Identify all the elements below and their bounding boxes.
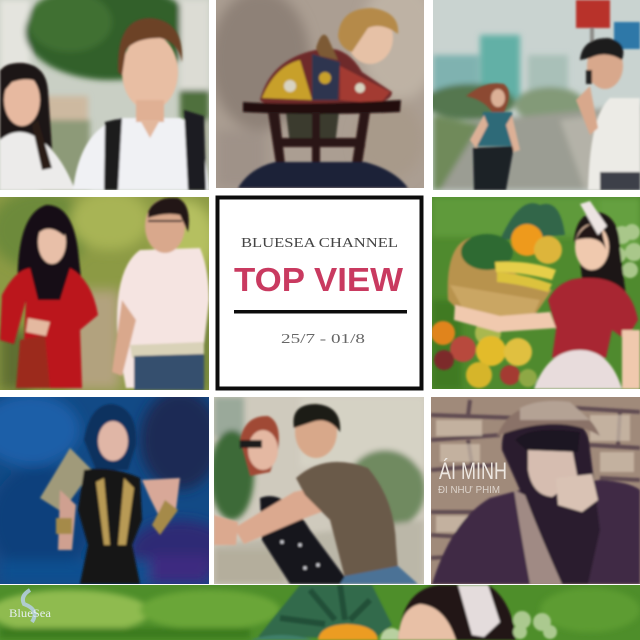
photo: couple in red dress and white shirt	[0, 190, 215, 390]
photo: girl with fruit basket	[431, 197, 640, 389]
photo: embracing couple	[210, 397, 425, 584]
divider rule	[234, 310, 407, 314]
logo: bluesea	[9, 590, 52, 622]
channel name: BLUESEA CHANNEL	[241, 236, 398, 251]
photo: singer in black and gold	[0, 397, 209, 584]
album title: ÁI MINH	[439, 458, 507, 485]
photo: ai minh album cover	[431, 397, 640, 584]
photo: bottom banner with girl and pineapple	[0, 585, 640, 640]
heading: top view: TOP VIEW	[234, 262, 403, 299]
album subtitle: ĐI NHƯ PHIM	[438, 485, 500, 496]
title box	[218, 198, 422, 388]
photo: street scene with phone call	[425, 0, 640, 190]
photo: couple with backpack	[0, 0, 209, 190]
logo: bluesea: BlueSea	[9, 606, 52, 620]
photo: man leaning on chair	[210, 0, 440, 188]
date range: 25/7 - 01/8	[281, 332, 365, 347]
